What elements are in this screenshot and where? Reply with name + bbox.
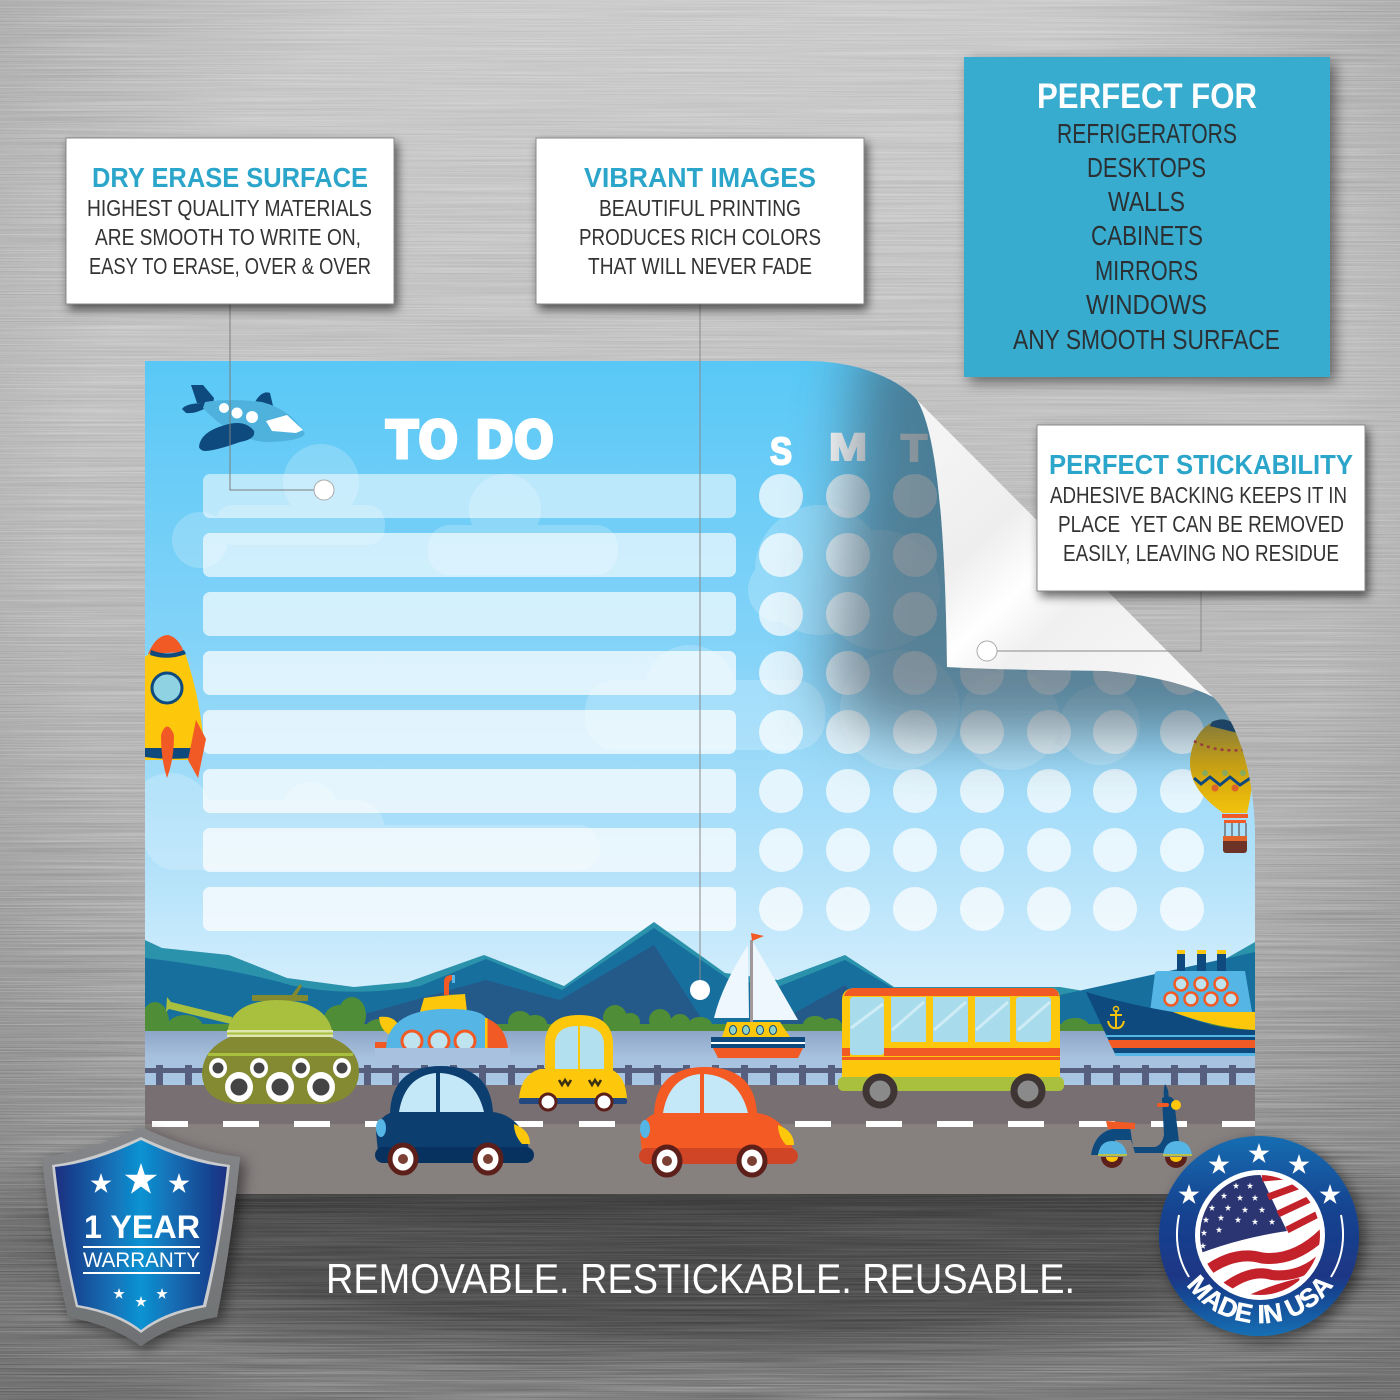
surface list: REFRIGERATORS (1057, 118, 1237, 149)
water (145, 1031, 1255, 1085)
lane dashes (152, 1121, 1258, 1127)
fold shadow (830, 335, 1300, 735)
made in USA text: MADE IN USA (1186, 1274, 1334, 1324)
heading: PERFECT FOR (1037, 77, 1257, 116)
seal stars (1179, 1143, 1340, 1204)
surface list: DESKTOPS (1087, 152, 1206, 183)
box (964, 57, 1330, 377)
road lower lane (145, 1124, 1255, 1194)
icon: airplane (182, 385, 305, 451)
badge: 1 year warranty (42, 1127, 240, 1346)
seal disc (1159, 1136, 1359, 1336)
vehicle: submarine (375, 975, 510, 1050)
body text (579, 195, 821, 279)
leader line and dot (977, 591, 1201, 661)
clouds (128, 444, 1140, 870)
heading: VIBRANT IMAGES (584, 162, 816, 193)
guardrail (145, 1065, 1255, 1085)
leader line and dot (230, 304, 334, 500)
heading: DRY ERASE SURFACE (92, 162, 368, 193)
badge: made in USA (1158, 1134, 1371, 1348)
vehicle: sailboat (711, 933, 805, 1058)
box (536, 138, 864, 304)
1 year: 1 YEAR (84, 1209, 200, 1245)
warranty: WARRANTY (83, 1249, 200, 1272)
callout: perfect stickability (977, 425, 1365, 661)
surface list (1013, 118, 1280, 355)
body text: PRODUCES RICH COLORS (579, 224, 821, 250)
icon: hot-air balloon (1190, 720, 1255, 853)
surface list: MIRRORS (1095, 255, 1198, 286)
surface list: WALLS (1108, 186, 1185, 217)
vehicle: bus (838, 988, 1064, 1105)
vehicle: blue car (375, 1066, 534, 1173)
vehicle: red car (639, 1067, 798, 1175)
body text: HIGHEST QUALITY MATERIALS (87, 195, 372, 221)
shoreline trees (145, 997, 1254, 1031)
tagline: REMOVABLE. RESTICKABLE. REUSABLE. (326, 1255, 1075, 1302)
day letters: T (901, 428, 927, 470)
mountains (145, 922, 1255, 1032)
callout: dry erase surface (66, 138, 394, 500)
sheet shadow on the metal (160, 1180, 1250, 1210)
body text: THAT WILL NEVER FADE (588, 253, 812, 279)
shield face (55, 1140, 227, 1330)
body text: BEAUTIFUL PRINTING (599, 195, 801, 221)
leader line and dot (690, 304, 710, 1000)
magnetic to-do chart sheet (128, 335, 1300, 1194)
box (66, 138, 394, 304)
body text: EASILY, LEAVING NO RESIDUE (1063, 540, 1339, 566)
callout: vibrant images (536, 138, 864, 1000)
peeled flap back (917, 400, 1213, 697)
surface list: CABINETS (1091, 220, 1203, 251)
surface list: WINDOWS (1086, 289, 1207, 320)
body text: ARE SMOOTH TO WRITE ON, (95, 224, 361, 250)
icon: rocket (140, 635, 206, 778)
surface list: ANY SMOOTH SURFACE (1013, 324, 1280, 355)
sky (145, 361, 1255, 990)
vehicle: taxi (519, 1015, 627, 1110)
title: TO DO: TO DO (386, 411, 554, 471)
road upper lane (145, 1085, 1255, 1124)
day letters: S (770, 431, 792, 473)
day letters: M (829, 427, 867, 469)
box (1037, 425, 1365, 591)
body text: EASY TO ERASE, OVER & OVER (89, 253, 371, 279)
body text (1050, 482, 1347, 566)
heading: PERFECT STICKABILITY (1049, 449, 1353, 480)
stars (91, 1163, 189, 1307)
day letters (770, 432, 928, 466)
waving flag (1190, 1170, 1325, 1300)
vehicle: ship (1086, 950, 1255, 1056)
shield frame (42, 1127, 240, 1346)
body text (87, 195, 372, 279)
panel: perfect for (964, 57, 1330, 377)
vehicle: tank (166, 984, 359, 1104)
task rows (203, 474, 736, 931)
seal arcs (1177, 1215, 1343, 1277)
day check circles (759, 474, 1204, 931)
body text: PLACE YET CAN BE REMOVED (1058, 511, 1344, 537)
vehicle: scooter (1091, 1084, 1192, 1168)
